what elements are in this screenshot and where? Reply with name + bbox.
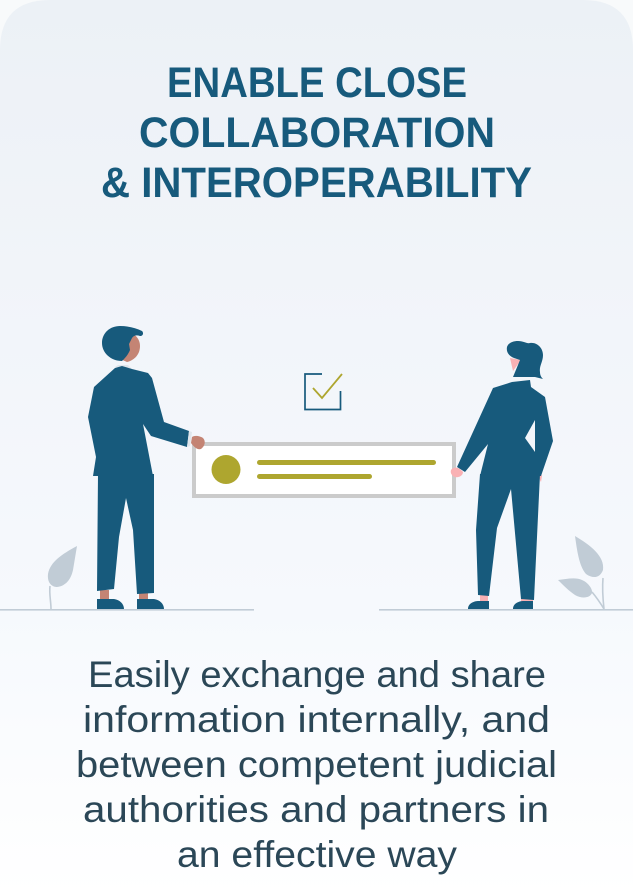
woman hands [451,468,542,482]
title: & INTEROPERABILITY [101,159,532,207]
man collar [115,365,132,369]
title: COLLABORATION [139,109,495,157]
woman face [510,358,521,371]
card lines [257,460,436,479]
figure: woman [451,341,553,609]
woman jacket [457,380,553,476]
body text: between competent judicial [76,744,557,785]
title: ENABLE CLOSE [167,59,467,107]
card dot [212,455,240,484]
man cuff [187,431,192,447]
body text: authorities and partners in [83,789,549,830]
woman hair [507,341,543,379]
man jacket [88,366,189,476]
woman ankles [480,594,533,602]
card [194,444,454,496]
man hand [191,436,205,449]
man face [118,332,140,362]
woman trousers [476,474,540,600]
title [101,59,532,207]
man hair [102,326,143,361]
woman shoes [468,601,533,609]
figure: man [88,326,205,609]
icon: left plant [48,546,77,609]
icon: checkbox [305,374,342,410]
icon: right plant [558,536,604,609]
woman collar [513,379,530,381]
man shoes [97,599,164,609]
man trousers [97,474,154,594]
body text [76,654,557,875]
body text: information internally, and [83,699,550,740]
body text: Easily exchange and share [88,654,546,695]
woman arm gap [525,420,535,452]
body text: an effective way [177,834,458,875]
man ankles [100,590,148,600]
ground line [0,609,633,611]
